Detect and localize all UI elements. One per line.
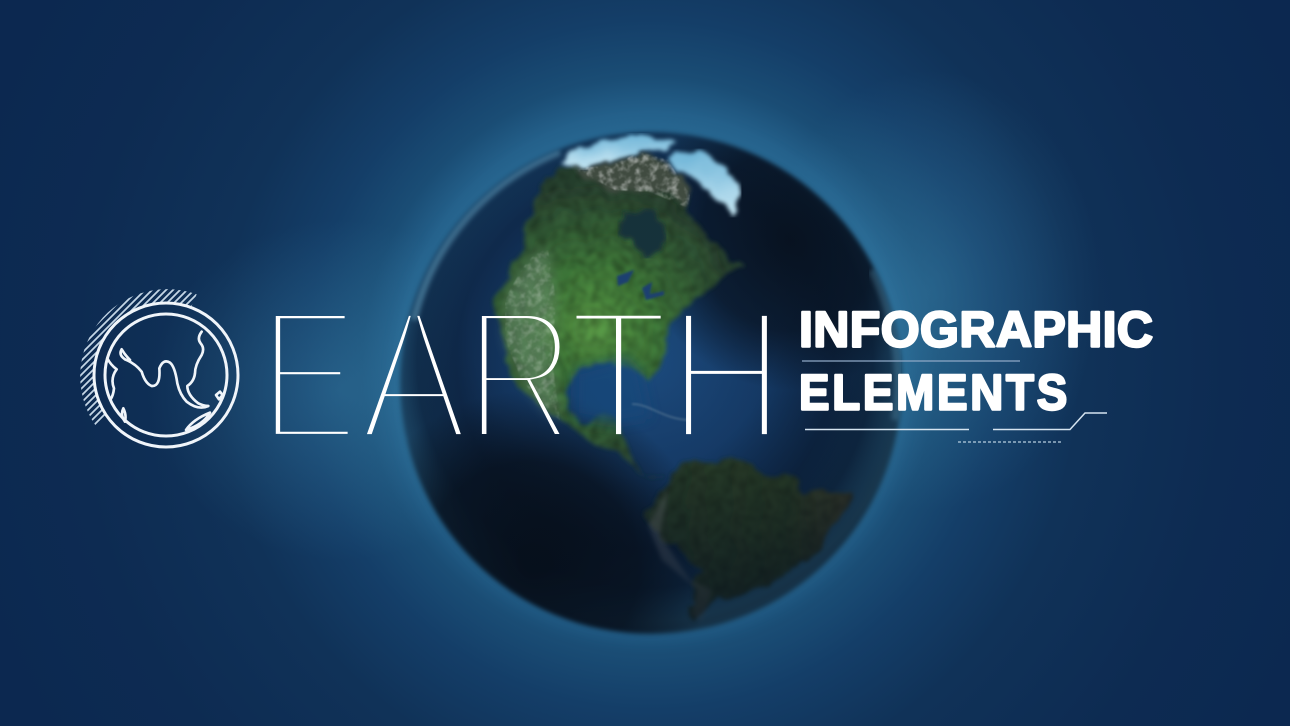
ocean bbox=[395, 127, 907, 639]
inner ring bbox=[105, 314, 227, 436]
Canadian arctic islands bbox=[572, 152, 690, 208]
title: EARTH: T bbox=[568, 269, 670, 480]
South America bbox=[644, 458, 850, 619]
subtitle: INFOGRAPHIC bbox=[799, 302, 1153, 358]
outer ring bbox=[94, 303, 238, 447]
continents bbox=[107, 332, 223, 430]
left atmosphere arc bbox=[414, 152, 560, 320]
South America texture bbox=[666, 462, 809, 546]
Gulf of Mexico bbox=[575, 358, 650, 424]
North America bbox=[498, 167, 743, 476]
subtitle: ELEMENTS bbox=[799, 364, 1070, 420]
subtitle bbox=[799, 302, 1153, 420]
title: EARTH: H bbox=[668, 270, 785, 481]
title: EARTH: E bbox=[259, 270, 359, 481]
right atmosphere arc bbox=[872, 270, 898, 420]
icon: earth emblem bbox=[80, 289, 240, 448]
Caribbean islands bbox=[632, 404, 690, 420]
title: EARTH bbox=[276, 316, 767, 434]
title: EARTH: A bbox=[359, 269, 469, 481]
title: EARTH: R bbox=[464, 269, 576, 481]
night shading bbox=[412, 400, 690, 634]
polar ice bbox=[555, 135, 682, 168]
hatching bbox=[80, 289, 197, 425]
decorative circuit lines bbox=[802, 361, 1107, 442]
left glow bbox=[150, 220, 530, 560]
right glow bbox=[760, 70, 1100, 510]
globe bbox=[390, 120, 920, 650]
land texture bbox=[494, 169, 728, 455]
Hudson Bay bbox=[620, 210, 664, 256]
Greenland bbox=[668, 152, 738, 214]
Andes bbox=[648, 495, 710, 614]
Great Lakes bbox=[617, 270, 664, 300]
western mountains bbox=[505, 250, 560, 420]
atmosphere glow bbox=[395, 122, 907, 634]
overall shading bbox=[395, 127, 907, 639]
